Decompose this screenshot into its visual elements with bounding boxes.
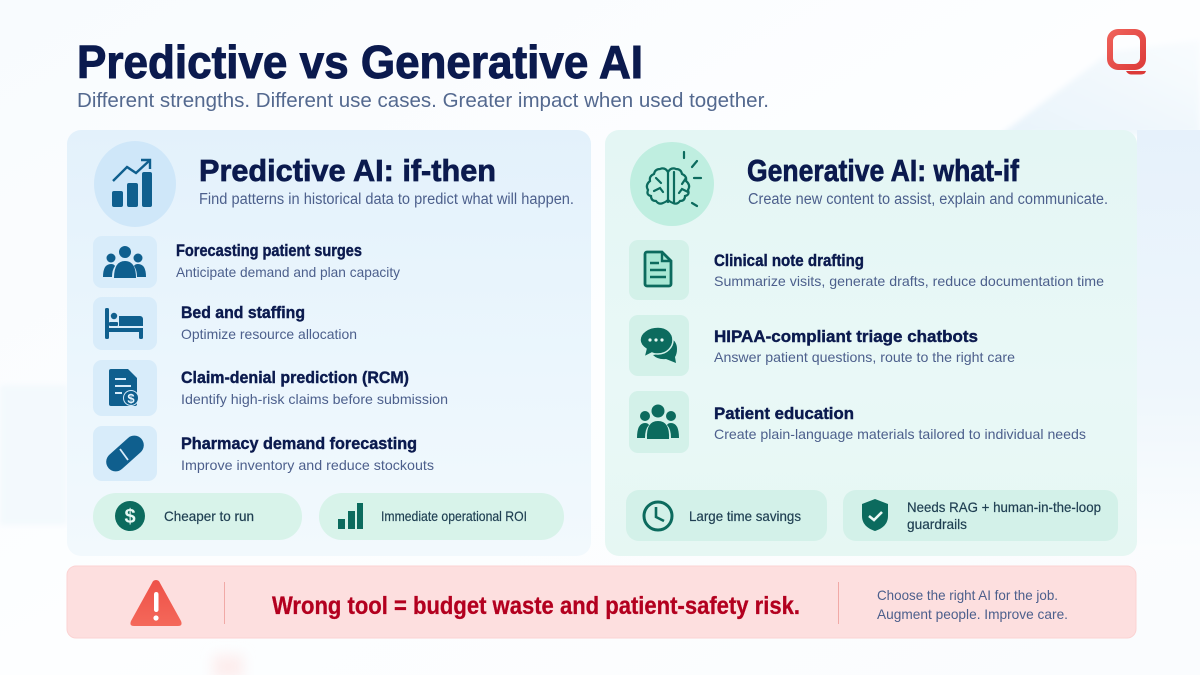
item: pharmacy demand forecasting: Improve inventory and reduce stockouts [181, 457, 434, 473]
item: claim-denial prediction: Identify high-risk claims before submission [181, 391, 448, 407]
item: clinical note drafting: Clinical note drafting [714, 252, 864, 270]
item: patient education: Create plain-language materials tailored to individual needs [714, 426, 1086, 442]
icon: rising chart [94, 141, 176, 227]
item: bed and staffing [93, 297, 357, 350]
pill: guardrails: guardrails [907, 516, 967, 532]
panel: predictive AI [67, 130, 591, 556]
icon: logo [1107, 29, 1146, 74]
item: pharmacy demand forecasting: Pharmacy demand forecasting [181, 435, 417, 453]
pill: immediate operational ROI: Immediate operational ROI [381, 508, 527, 524]
predictive description: Find patterns in historical data to predict what will happen. [199, 191, 574, 208]
item: forecasting patient surges: Anticipate demand and plan capacity [176, 264, 400, 280]
item: claim-denial prediction [93, 360, 448, 416]
icon: brain [630, 142, 714, 226]
item: bed and staffing: Bed and staffing [181, 304, 305, 322]
pill: large time savings: Large time savings [689, 508, 801, 524]
pill: guardrails: Needs RAG + human-in-the-loop [907, 499, 1101, 515]
item: forecasting patient surges [93, 236, 400, 288]
heading: predictive AI: Predictive AI: if-then [199, 153, 496, 188]
title: Predictive vs Generative AI [77, 36, 643, 88]
item: clinical note drafting: Summarize visits, generate drafts, reduce documentation time [714, 273, 1104, 289]
icon: warning triangle [130, 580, 182, 626]
item: claim-denial prediction: Claim-denial prediction (RCM) [181, 369, 409, 387]
closing note [877, 587, 1068, 622]
item: bed and staffing: Optimize resource allocation [181, 326, 357, 342]
closing note: Choose the right AI for the job. [877, 587, 1058, 603]
item: triage chatbots [629, 315, 1015, 376]
warning message: Wrong tool = budget waste and patient-safety risk. [272, 592, 800, 620]
subtitle: Different strengths. Different use cases. Greater impact when used together. [77, 90, 769, 112]
item: forecasting patient surges: Forecasting patient surges [176, 242, 362, 260]
pill: large time savings [626, 490, 827, 541]
item: triage chatbots: HIPAA-compliant triage chatbots [714, 328, 978, 346]
closing note: Augment people. Improve care. [877, 606, 1068, 622]
pill: cheaper to run: $ [124, 506, 136, 528]
generative description: Create new content to assist, explain and communicate. [748, 191, 1108, 208]
item: patient education: Patient education [714, 405, 854, 423]
item: triage chatbots: Answer patient questions, route to the right care [714, 349, 1015, 365]
pill: immediate operational ROI [319, 493, 564, 540]
pill: cheaper to run: Cheaper to run [164, 508, 254, 524]
warning banner [67, 566, 1136, 638]
item: patient education [629, 391, 1086, 453]
panel: generative AI [605, 130, 1137, 556]
heading: generative AI: Generative AI: what-if [747, 153, 1020, 188]
pill: cheaper to run [93, 493, 302, 540]
item: clinical note drafting [629, 240, 1104, 300]
item: pharmacy demand forecasting [93, 426, 434, 481]
pill: guardrails [843, 490, 1118, 541]
item: claim-denial prediction: $ [127, 391, 135, 406]
